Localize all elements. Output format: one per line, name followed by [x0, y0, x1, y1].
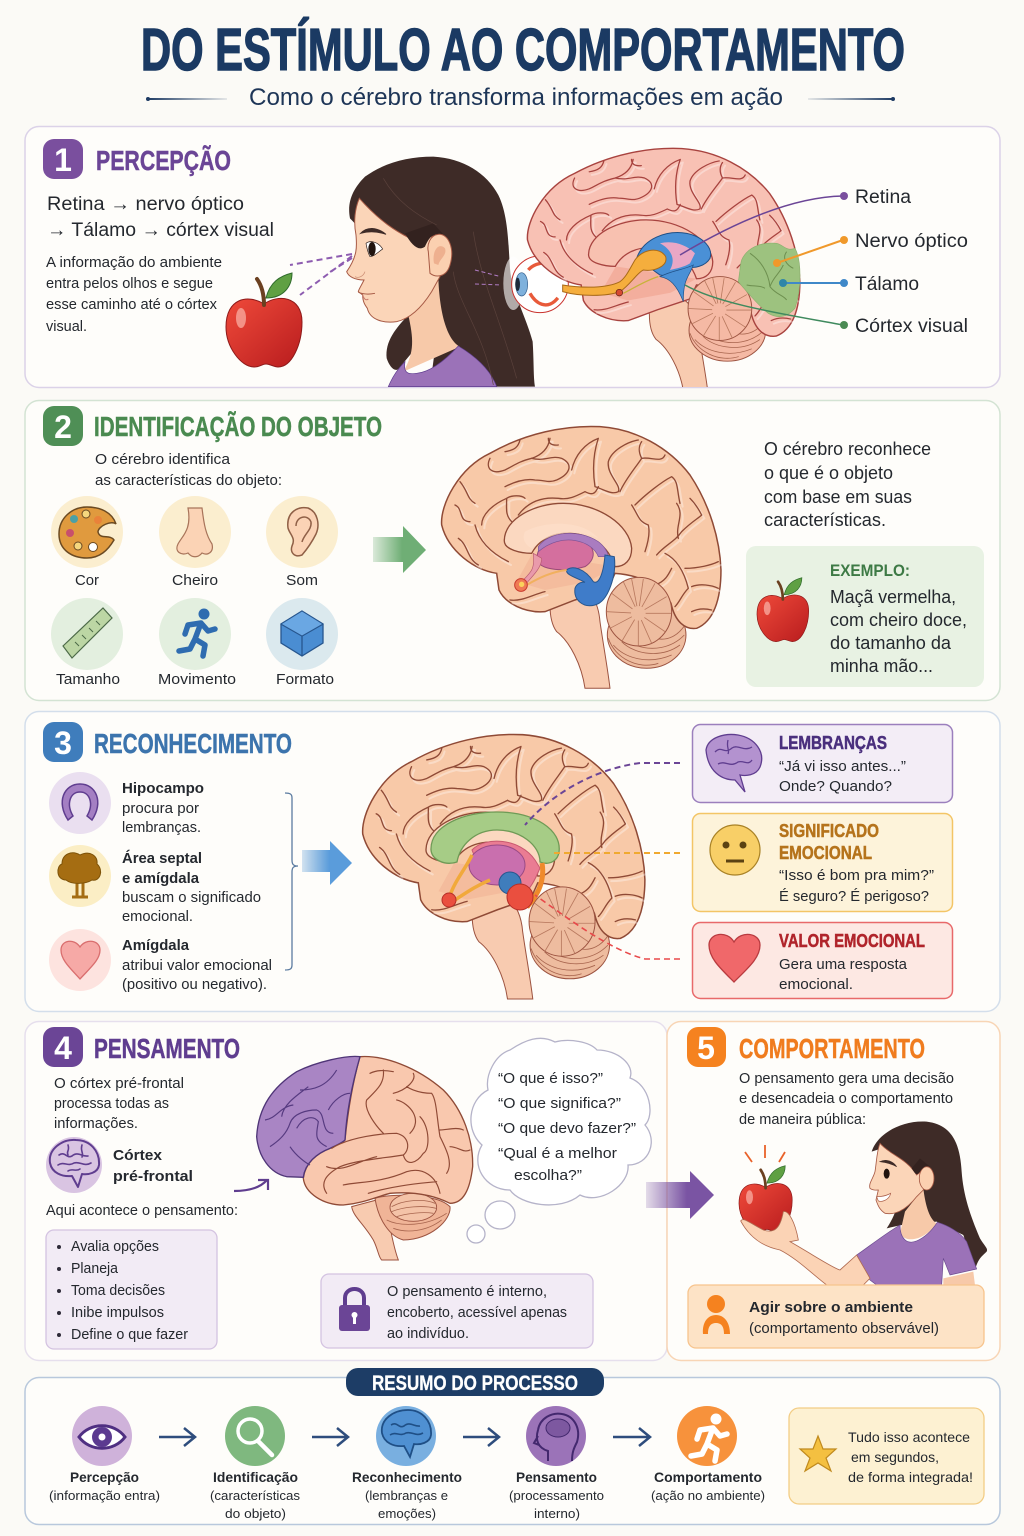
- panel: pensamento: [25, 1022, 667, 1360]
- step: comportamento: (ação no ambiente): [651, 1488, 765, 1503]
- step: comportamento: [651, 1406, 765, 1503]
- box: significado emocional: [692, 814, 952, 912]
- arrow: [312, 1428, 348, 1446]
- intro text: informações.: [54, 1115, 138, 1132]
- badge 5: [687, 1027, 726, 1067]
- item: área septal: emocional.: [122, 908, 193, 925]
- item: hipocampo: procura por: [122, 800, 199, 817]
- item: área septal: Área septal: [122, 850, 202, 867]
- step: comportamento: Comportamento: [654, 1469, 762, 1485]
- summary pill: [346, 1368, 604, 1396]
- brain labels: Nervo óptico: [855, 231, 968, 252]
- icon: apple held: [739, 1166, 792, 1232]
- lock callout: encoberto, acessível apenas: [387, 1305, 567, 1321]
- box: valor emocional: Gera uma resposta: [779, 956, 908, 973]
- step: identificação: [210, 1406, 301, 1521]
- brain labels: Tálamo: [855, 274, 919, 295]
- box: significado emocional: SIGNIFICADO: [779, 821, 879, 841]
- step: identificação: Identificação: [213, 1469, 298, 1485]
- feature: cheiro: Cheiro: [172, 572, 218, 589]
- badge 4: 4: [54, 1030, 72, 1066]
- callout: exemplo: Maçã vermelha,: [830, 587, 956, 607]
- intro text: [739, 1071, 954, 1128]
- list box: Toma decisões: [71, 1283, 165, 1299]
- icon: apple: [226, 273, 302, 367]
- intro text: O cérebro identifica: [95, 451, 231, 468]
- step: reconhecimento: emoções): [378, 1506, 436, 1521]
- description: visual.: [46, 319, 87, 335]
- step: percepção: [49, 1406, 160, 1503]
- step: pensamento: interno): [534, 1506, 580, 1521]
- subtitle: Como o cérebro transforma informações em ação: [249, 84, 783, 111]
- explanation text: O cérebro reconhece: [764, 439, 931, 459]
- description: entra pelos olhos e segue: [46, 276, 213, 292]
- arrow: [463, 1428, 499, 1446]
- pathway text: Retina → nervo óptico: [47, 194, 244, 215]
- step: pensamento: (processamento: [509, 1488, 604, 1503]
- intro text: as características do objeto:: [95, 472, 282, 489]
- brain recognition: [363, 734, 645, 999]
- panel: reconhecimento: [25, 712, 1000, 1012]
- item: amígdala: atribui valor emocional: [122, 957, 272, 974]
- lock callout: [321, 1274, 593, 1348]
- arrow: [613, 1428, 650, 1446]
- brain with visual pathway: [527, 148, 800, 392]
- intro text: [54, 1075, 184, 1132]
- icon: córtex pré-frontal: pré-frontal: [113, 1168, 193, 1185]
- item: hipocampo: [49, 772, 204, 836]
- callout: agir: Agir sobre o ambiente: [749, 1299, 913, 1316]
- connectors: [525, 763, 680, 959]
- feature: som: [266, 496, 338, 589]
- brain labels: [855, 187, 968, 337]
- callout: exemplo: do tamanho da: [830, 633, 952, 653]
- rays: [745, 1145, 785, 1162]
- heading identificação: IDENTIFICAÇÃO DO OBJETO: [94, 411, 382, 442]
- box: significado emocional: “Isso é bom pra mim?”: [779, 867, 934, 884]
- intro text: O córtex pré-frontal: [54, 1075, 184, 1092]
- callout: exemplo: EXEMPLO:: [830, 561, 910, 580]
- item: amígdala: Amígdala: [122, 937, 190, 954]
- item: amígdala: [49, 929, 272, 993]
- description: [46, 255, 222, 335]
- heading comportamento: COMPORTAMENTO: [739, 1033, 925, 1064]
- lock callout: ao indivíduo.: [387, 1326, 469, 1342]
- small arrow: [234, 1180, 268, 1191]
- callout: star: em segundos,: [851, 1449, 939, 1465]
- intro text: O pensamento gera uma decisão: [739, 1071, 954, 1087]
- thought cloud: [467, 1038, 651, 1243]
- pathway text: [47, 194, 274, 241]
- box: valor emocional: VALOR EMOCIONAL: [779, 931, 925, 951]
- list box: Define o que fazer: [71, 1327, 188, 1343]
- bracket: [285, 793, 298, 970]
- callout: star: de forma integrada!: [848, 1469, 973, 1485]
- step: reconhecimento: [352, 1406, 462, 1521]
- step: pensamento: [509, 1406, 604, 1521]
- explanation text: o que é o objeto: [764, 463, 893, 483]
- intro text: [95, 451, 282, 489]
- callout: exemplo: [746, 546, 984, 687]
- summary pill: RESUMO DO PROCESSO: [372, 1372, 578, 1395]
- step: reconhecimento: Reconhecimento: [352, 1469, 462, 1485]
- icon: córtex pré-frontal: Córtex: [113, 1147, 163, 1164]
- badge 2: [43, 406, 83, 446]
- panel: resumo do processo: [25, 1368, 1000, 1524]
- callout: star: Tudo isso acontece: [848, 1429, 970, 1445]
- badge 3: [43, 722, 83, 762]
- item: amígdala: (positivo ou negativo).: [122, 976, 267, 993]
- badge 4: [43, 1027, 83, 1067]
- feature: cor: [51, 496, 123, 589]
- pathway text: → Tálamo → córtex visual: [47, 220, 274, 241]
- feature: cor: Cor: [75, 572, 99, 589]
- brain labels: Córtex visual: [855, 316, 968, 337]
- lock callout: O pensamento é interno,: [387, 1284, 547, 1300]
- intro text: e desencadeia o comportamento: [739, 1091, 953, 1107]
- feature: cheiro: [159, 496, 231, 589]
- box: valor emocional: emocional.: [779, 976, 853, 993]
- label: aqui acontece: Aqui acontece o pensamento:: [46, 1202, 238, 1219]
- list box: [46, 1230, 217, 1349]
- feature: tamanho: [51, 598, 123, 688]
- step: identificação: do objeto): [225, 1506, 286, 1521]
- callout: agir: (comportamento observável): [749, 1321, 939, 1337]
- step: percepção: (informação entra): [49, 1488, 160, 1503]
- callout: exemplo: com cheiro doce,: [830, 610, 967, 630]
- item: área septal: buscam o significado: [122, 889, 261, 906]
- thought cloud: escolha?”: [514, 1167, 582, 1184]
- item: área septal: e amígdala: [122, 870, 200, 887]
- arrow green: [373, 526, 426, 573]
- box: significado emocional: É seguro? É perigoso?: [779, 888, 929, 905]
- heading reconhecimento: RECONHECIMENTO: [94, 728, 292, 759]
- step: percepção: Percepção: [70, 1469, 139, 1485]
- description: A informação do ambiente: [46, 255, 222, 271]
- intro text: processa todas as: [54, 1095, 169, 1112]
- arrow purple: [646, 1171, 714, 1219]
- badge 1: 1: [54, 142, 72, 178]
- thought cloud: “O que devo fazer?”: [498, 1120, 636, 1137]
- panel: percepção: [25, 126, 1000, 392]
- feature: formato: Formato: [276, 671, 334, 688]
- feature: formato: [266, 598, 338, 688]
- step: reconhecimento: (lembranças e: [365, 1488, 448, 1503]
- icon: córtex pré-frontal: [46, 1137, 193, 1193]
- badge 1: [43, 139, 83, 179]
- badge 2: 2: [54, 409, 72, 445]
- item: área septal: [49, 845, 261, 925]
- item: hipocampo: lembranças.: [122, 819, 201, 836]
- box: valor emocional: [692, 922, 952, 998]
- arrow: [159, 1428, 195, 1446]
- list box: Avalia opções: [71, 1239, 159, 1255]
- explanation text: com base em suas: [764, 487, 912, 507]
- box: lembranças: “Já vi isso antes...”: [779, 758, 906, 775]
- brain identification: [442, 426, 721, 688]
- feature: movimento: [158, 598, 236, 688]
- description: esse caminho até o córtex: [46, 297, 218, 313]
- thought cloud: “Qual é a melhor: [498, 1145, 617, 1162]
- badge 5: 5: [697, 1030, 715, 1066]
- box: significado emocional: EMOCIONAL: [779, 843, 872, 863]
- callout: star: [789, 1408, 984, 1504]
- list box: Planeja: [71, 1261, 119, 1277]
- thought cloud: “O que é isso?”: [498, 1070, 603, 1087]
- item: hipocampo: Hipocampo: [122, 780, 204, 797]
- heading percepção: PERCEPÇÃO: [96, 145, 231, 176]
- leader lines: [680, 192, 848, 329]
- heading pensamento: PENSAMENTO: [94, 1033, 240, 1064]
- list box: Inibe impulsos: [71, 1305, 164, 1321]
- box: lembranças: Onde? Quando?: [779, 778, 892, 795]
- intro text: de maneira pública:: [739, 1112, 866, 1128]
- explanation text: [764, 439, 931, 530]
- callout: exemplo: minha mão...: [830, 656, 933, 676]
- eye cross-section: [475, 256, 568, 313]
- feature: tamanho: Tamanho: [56, 671, 120, 688]
- girl in profile: [347, 157, 568, 387]
- box: lembranças: LEMBRANÇAS: [779, 733, 887, 753]
- feature: som: Som: [286, 572, 318, 589]
- box: lembranças: [692, 724, 952, 802]
- brain labels: Retina: [855, 187, 911, 208]
- step: identificação: (características: [210, 1488, 301, 1503]
- callout: agir: [688, 1285, 984, 1348]
- thought cloud: “O que significa?”: [498, 1095, 621, 1112]
- panel: comportamento: [667, 1022, 1000, 1360]
- feature: movimento: Movimento: [158, 671, 236, 688]
- gaze dashes: [290, 254, 352, 295]
- arrow blue: [302, 841, 352, 885]
- brain with prefrontal cortex: [257, 1056, 473, 1260]
- badge 3: 3: [54, 725, 72, 761]
- girl holding apple: [741, 1122, 987, 1285]
- explanation text: características.: [764, 510, 886, 530]
- step: pensamento: Pensamento: [516, 1469, 597, 1485]
- panel: identificação do objeto: [25, 400, 1000, 700]
